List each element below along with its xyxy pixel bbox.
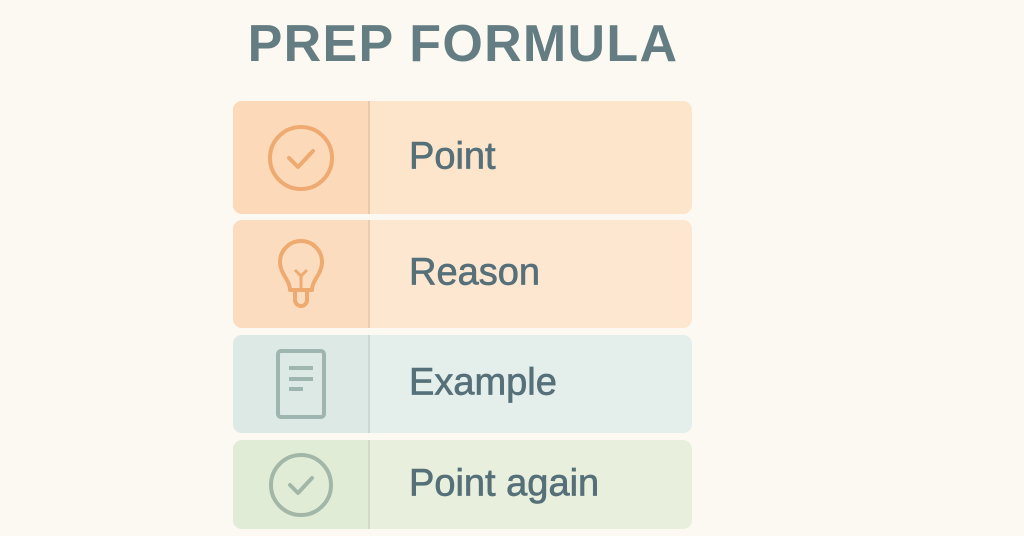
label: Reason: Reason — [409, 252, 540, 294]
label: Point: Point — [409, 135, 496, 177]
row: point — [233, 101, 692, 214]
row: point again — [233, 440, 692, 529]
icon: lightbulb — [278, 239, 324, 308]
label: Point again: Point again — [409, 462, 599, 504]
icon: check circle — [268, 125, 334, 191]
icon: check circle — [269, 453, 333, 517]
title: PREP FORMULA — [248, 15, 678, 73]
row: reason — [233, 220, 692, 328]
label: Example: Example — [409, 362, 557, 404]
icon: document — [276, 349, 326, 419]
row: example — [233, 335, 692, 433]
